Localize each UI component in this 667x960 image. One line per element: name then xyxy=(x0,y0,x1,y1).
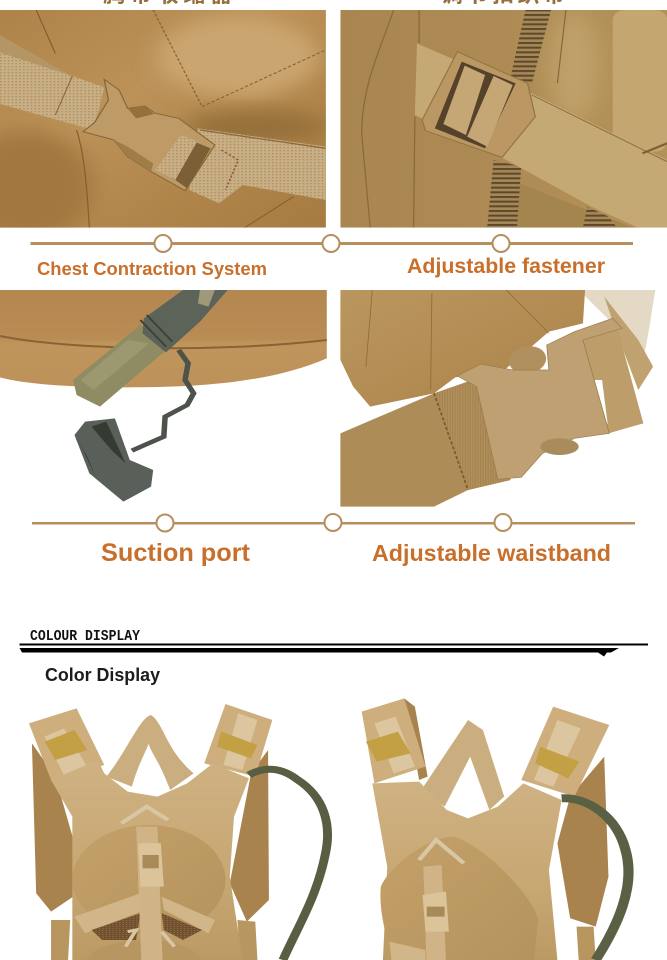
adjuster buckle xyxy=(422,52,535,157)
backpack left xyxy=(29,704,328,960)
mouthpiece xyxy=(73,325,168,407)
adjuster strap xyxy=(415,43,667,228)
header rule with arrow xyxy=(20,644,648,656)
label: chest contraction system: Chest Contraction System xyxy=(37,258,267,279)
zipper xyxy=(511,10,551,83)
bite valve cover xyxy=(74,418,153,502)
label: adjustable waistband: Adjustable waistband xyxy=(372,540,611,566)
hydration hose xyxy=(249,769,328,960)
valve cap xyxy=(143,290,228,352)
strap right xyxy=(189,128,326,203)
section header: colour display: COLOUR DISPLAY xyxy=(30,628,140,645)
belt xyxy=(340,379,511,507)
panel: suction port photo xyxy=(0,290,327,502)
label: suction port: Suction port xyxy=(101,539,251,567)
heading: color display: Color Display xyxy=(45,664,161,685)
panel: chest contraction buckle photo xyxy=(0,10,328,243)
timeline divider top xyxy=(30,235,633,252)
timeline divider bottom xyxy=(32,514,635,532)
buckle xyxy=(83,79,215,191)
panel: adjustable waistband photo xyxy=(340,290,655,507)
backpack right xyxy=(362,698,629,960)
side release buckle xyxy=(457,318,622,479)
panel: adjustable fastener photo xyxy=(340,10,667,228)
label: adjustable fastener: Adjustable fastener xyxy=(407,255,605,278)
side strap xyxy=(604,297,653,390)
hydration hose xyxy=(562,798,629,960)
strap left xyxy=(0,53,104,130)
tether cord xyxy=(132,350,194,451)
